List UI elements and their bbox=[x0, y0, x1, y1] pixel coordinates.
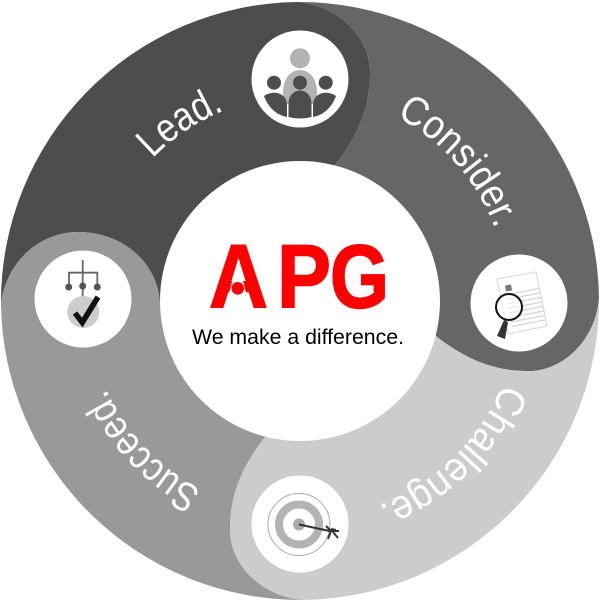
logo: G: G bbox=[330, 228, 389, 328]
icon: magnifier over document bbox=[470, 254, 568, 352]
label: Consider: Consider. bbox=[402, 97, 512, 226]
segment: Consider bbox=[297, 2, 599, 371]
segment: Succeed bbox=[1, 232, 303, 600]
label: Lead: Lead. bbox=[135, 88, 222, 156]
logo: APG: A bbox=[209, 228, 268, 328]
label: Challenge: Challenge. bbox=[381, 389, 524, 518]
icon: hierarchy with check bbox=[34, 250, 132, 348]
label: Succeed: Succeed. bbox=[85, 392, 198, 511]
icon: target with arrow bbox=[252, 476, 348, 572]
icon: people bbox=[252, 30, 348, 128]
tagline: We make a difference. bbox=[192, 326, 404, 349]
logo: APG bbox=[209, 228, 389, 328]
center circle bbox=[160, 161, 440, 441]
logo: P: P bbox=[277, 228, 331, 328]
logo: A counter cut-out bbox=[224, 259, 250, 310]
logo: A dot bbox=[231, 282, 244, 295]
segment: Challenge bbox=[230, 298, 599, 600]
segment: Lead bbox=[1, 2, 370, 307]
